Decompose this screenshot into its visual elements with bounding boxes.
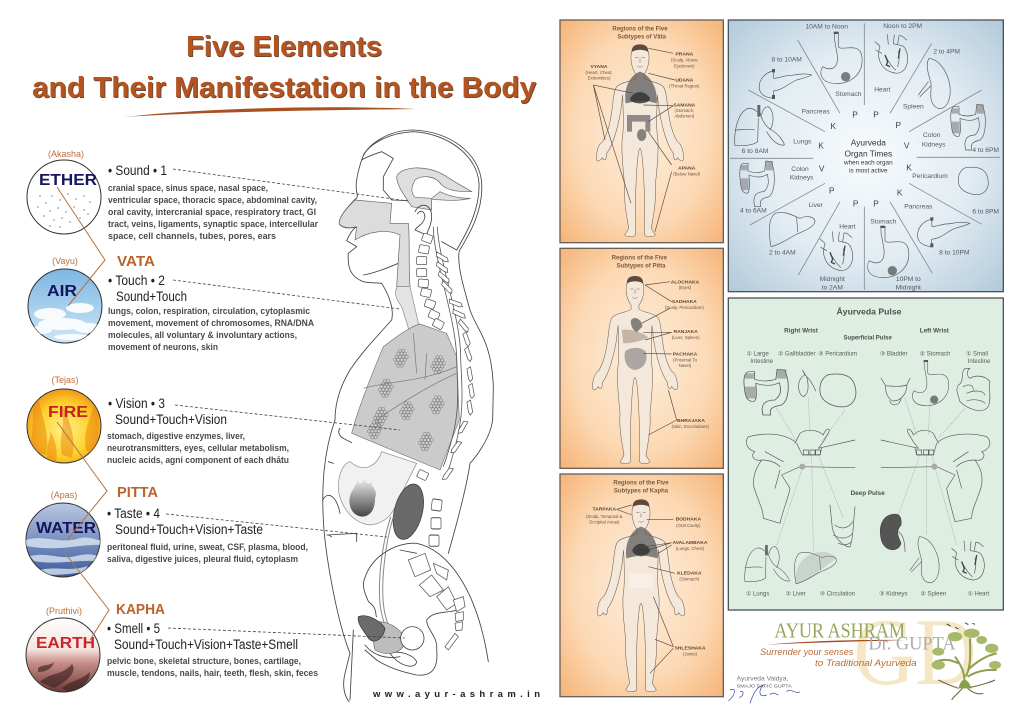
kapha body figure	[598, 499, 684, 692]
time and organ labels: Liver	[808, 202, 824, 209]
air block	[28, 253, 314, 353]
vata labels: Extremities)	[588, 76, 611, 81]
pulse organ labels	[746, 350, 991, 597]
logo watermark letters: GD	[853, 599, 977, 705]
pitta labels: (Proximal To	[673, 357, 698, 362]
pulse organ labels: ① Large	[746, 350, 769, 357]
vata labels: (Below Navel)	[673, 172, 701, 177]
body front and back lower outline	[323, 420, 493, 702]
pulse organ labels: ② Gallbladder	[778, 350, 815, 357]
pulse headings: Deep Pulse	[851, 490, 885, 497]
centre title	[843, 137, 893, 175]
time and organ labels: Kidneys	[790, 175, 814, 182]
ether text: ventricular space, thoracic space, abdominal cavity,	[108, 195, 317, 206]
time and organ labels: 8 to 10AM	[771, 56, 802, 63]
pitta heading: PITTA	[117, 484, 158, 501]
pitta panel title	[612, 255, 668, 269]
pulse organ labels: ① Lungs	[746, 590, 769, 597]
panel: vata subtypes	[560, 20, 723, 243]
time and organ labels: Stomach	[870, 219, 897, 226]
panel: ayurveda pulse	[728, 298, 1003, 610]
earth block	[26, 601, 318, 692]
bladder and rectum	[358, 616, 424, 653]
vata labels: PRANA	[675, 52, 694, 58]
time and organ labels: Spleen	[903, 104, 924, 111]
kapha labels: (Stomach)	[679, 577, 700, 582]
kapha labels: SHLESHAKA	[674, 646, 706, 652]
centre title: Organ Times	[844, 148, 892, 158]
organ drawings	[735, 32, 988, 278]
lungs	[352, 324, 459, 470]
vaidya credit: SMAJO SAFIĆ GUPTA	[737, 682, 792, 689]
ether text: tract, veins, ligaments, synaptic space, intercellular	[108, 219, 318, 230]
ureter	[379, 517, 395, 637]
fire text: neurotransmitters, eyes, cellular metabolism,	[107, 443, 289, 454]
dosha letters ring: P	[896, 120, 902, 130]
pitta labels: (Scalp, Pericardium)	[665, 305, 704, 310]
pulse headings: Left Wrist	[920, 327, 950, 334]
kapha labels: Occipital Areas)	[589, 520, 620, 525]
pulse organ labels: ② Stomach	[920, 350, 950, 357]
time and organ labels: 4 to 6AM	[740, 208, 767, 215]
pulse organ labels: Intestine	[968, 359, 991, 365]
time and organ labels: Stomach	[835, 91, 862, 98]
time and organ labels: 6 to 8AM	[742, 148, 768, 155]
air text: movement, movement of chromosomes, RNA/DNA	[108, 318, 314, 329]
pulse organ labels: ① Small	[966, 350, 988, 357]
dosha letters ring	[818, 109, 912, 208]
fire text	[107, 396, 289, 466]
icon: fire circle: FIRE	[48, 404, 88, 421]
icon: air circle: AIR	[47, 283, 77, 300]
kapha labels: BODHAKA	[676, 517, 701, 523]
icon: earth circle: EARTH	[36, 635, 95, 652]
time and organ labels: Heart	[874, 86, 891, 93]
pitta labels: (Liver, Spleen)	[672, 335, 700, 340]
icon: ether circle	[27, 160, 101, 234]
kapha leader lines	[617, 505, 675, 673]
air text	[108, 273, 314, 353]
pitta labels: BHRAJAKA	[677, 418, 705, 424]
website url: www.ayur-ashram.in	[372, 689, 540, 700]
time and organ labels: 10PM to	[896, 276, 921, 283]
nasal and throat cavities	[339, 200, 410, 287]
time and organ labels: Colon	[923, 132, 941, 139]
pitta labels: PACHAKA	[673, 351, 698, 357]
water sanskrit label: (Apas)	[51, 490, 77, 500]
centre title: when each organ	[843, 160, 893, 167]
icon: ether circle: ETHER	[39, 172, 97, 189]
air text: • Touch • 2	[108, 273, 165, 288]
earth sanskrit label: (Pruthivi)	[46, 606, 82, 616]
earth text	[107, 621, 318, 679]
clock spokes	[730, 23, 1000, 290]
time and organ labels: 10AM to Noon	[805, 24, 848, 31]
anatomical side-view body	[323, 130, 493, 702]
dosha letters ring: P	[829, 186, 835, 196]
kapha labels: AVALAMBAKA	[673, 540, 708, 546]
kapha panel title: Regions of the Five	[613, 480, 669, 486]
dosha bracket lines	[57, 187, 109, 640]
fire text: nucleic acids, agni component of each dhātu	[107, 455, 289, 466]
dotted connector: touch to throat	[173, 280, 400, 309]
air text: molecules, all voluntary & involuntary actions,	[108, 330, 297, 341]
fire text: Sound+Touch+Vision	[115, 412, 227, 427]
water text	[107, 506, 308, 565]
time and organ labels: Midnight	[896, 285, 921, 292]
pitta labels: SADHAKA	[672, 299, 697, 305]
pulse connector lines	[777, 398, 965, 552]
pulse organ labels: ③ Pericardium	[818, 350, 857, 357]
ether text: space, cell channels, tubes, pores, ears	[108, 231, 276, 242]
vata labels: (Stomach,	[674, 108, 694, 113]
kapha heading: KAPHA	[116, 601, 165, 618]
water text: peritoneal fluid, urine, sweat, CSF, plasma, blood,	[107, 542, 308, 553]
dosha letters ring: P	[873, 109, 879, 119]
vata labels: UDANA	[675, 77, 694, 83]
fire block	[27, 375, 289, 466]
time and organ labels: Heart	[839, 224, 856, 231]
kapha labels: KLEDAKA	[677, 571, 702, 577]
ether sanskrit label: (Akasha)	[48, 149, 84, 159]
pulse organ labels: ② Spleen	[920, 590, 946, 597]
earth text: • Smell • 5	[107, 621, 160, 636]
vata labels: (Throat Region)	[669, 83, 700, 88]
pulse organ labels: ② Liver	[786, 590, 806, 597]
icon: air circle	[28, 269, 102, 343]
time and organ labels: Pericardium	[912, 173, 948, 180]
pulse organ labels: Intestine	[750, 359, 774, 365]
pulse headings: Right Wrist	[784, 327, 819, 334]
air text: Sound+Touch	[116, 289, 187, 304]
title underline swoosh	[125, 107, 416, 117]
fire text: • Vision • 3	[108, 396, 165, 411]
dotted connector: vision to lungs	[175, 405, 400, 430]
dr gupta text: Dr. GUPTA	[868, 633, 956, 654]
vaidya credit	[737, 676, 792, 689]
earth text: Sound+Touch+Vision+Taste+Smell	[114, 637, 298, 652]
time and organ labels: Midnight	[820, 276, 845, 283]
dosha letters ring: V	[904, 141, 910, 151]
pulse headings: Superficial Pulse	[844, 336, 892, 342]
pulse organ labels: ① Heart	[967, 590, 989, 597]
pulse organ labels: ③ Circulation	[820, 590, 855, 597]
hands taking pulse	[746, 429, 990, 523]
dosha letters ring: V	[819, 163, 825, 173]
air text: lungs, colon, respiration, circulation, cytoplasmic	[108, 306, 311, 317]
air sanskrit label: (Vayu)	[52, 256, 78, 266]
ether text: cranial space, sinus space, nasal space,	[108, 183, 268, 194]
vata body figure	[597, 44, 683, 237]
vata labels: Eyebrows)	[674, 63, 695, 68]
dosha letters ring: P	[873, 198, 879, 208]
dotted connector: taste to kidney	[166, 514, 387, 537]
vata labels	[586, 52, 701, 177]
spine	[416, 227, 477, 546]
dosha letters ring: P	[852, 109, 858, 119]
time and organ labels: 2 to 4PM	[933, 49, 960, 56]
pitta labels: ALOCHAKA	[671, 280, 700, 286]
vata panel title	[612, 27, 668, 40]
vata heading: VATA	[117, 253, 155, 270]
kapha labels: (Joints)	[683, 652, 698, 657]
dosha letters ring: K	[831, 121, 837, 131]
time and organ labels: to 2AM	[822, 285, 843, 292]
time and organ labels: 4 to 6PM	[972, 147, 999, 154]
earth text: muscle, tendons, nails, hair, teeth, flesh, skin, feces	[107, 668, 318, 679]
time and organ labels: Kidneys	[922, 141, 946, 148]
kapha labels: (Lungs, Chest)	[676, 546, 705, 551]
water text: saliva, digestive juices, pleural fluid, cytoplasm	[107, 554, 298, 565]
time and organ labels: Pancreas	[802, 109, 830, 116]
vata leader lines	[593, 48, 675, 232]
time and organ labels: Lungs	[793, 139, 812, 146]
pitta labels: RANJAKA	[673, 329, 698, 335]
time and organ labels: 2 to 4AM	[769, 249, 796, 256]
logo swoosh	[767, 640, 907, 645]
pulse headings: Āyurveda Pulse	[837, 306, 902, 316]
pulse headings	[784, 306, 950, 497]
brain section	[397, 168, 472, 210]
ear	[415, 205, 432, 235]
water text: Sound+Touch+Vision+Taste	[115, 522, 263, 537]
kapha labels: (Oral Cavity)	[676, 523, 701, 528]
kapha panel title	[613, 480, 669, 494]
kapha labels: TARPAKA	[593, 507, 617, 513]
time and organ labels: 8 to 10PM	[939, 250, 970, 257]
sacrum and pelvis	[363, 543, 488, 675]
pitta leader lines	[642, 282, 677, 435]
vata labels: SAMANA	[673, 102, 696, 108]
trachea	[396, 287, 420, 333]
logo tagline	[760, 647, 917, 668]
kapha labels: (Scalp, Temporal &	[586, 514, 623, 519]
time and organ labels: 6 to 8PM	[972, 209, 999, 216]
time and organ labels: Colon	[791, 166, 809, 173]
centre title: Ayurveda	[851, 137, 886, 147]
vata labels: APANA	[678, 166, 696, 172]
vata labels: VYANA	[590, 64, 608, 70]
skull and face outline	[335, 130, 493, 420]
icon: water circle	[26, 503, 100, 577]
logo name: AYUR ASHRAM	[774, 618, 905, 642]
centre title: is most active	[849, 168, 888, 175]
logo tagline: Surrender your senses	[760, 647, 854, 657]
signature	[728, 685, 800, 703]
panel: pitta subtypes	[560, 248, 723, 468]
ether text: • Sound • 1	[108, 163, 167, 178]
earth text: pelvic bone, skeletal structure, bones, cartilage,	[107, 656, 301, 667]
ether text	[108, 163, 318, 242]
pitta labels: (Eyes)	[679, 285, 692, 290]
time and organ labels	[740, 23, 999, 292]
title: and Their Manifestation in the Body	[32, 72, 536, 104]
air text: movement of neurons, skin	[108, 342, 218, 353]
time and organ labels: Noon to 2PM	[883, 23, 922, 30]
dotted connector: sound to head	[173, 169, 408, 201]
water block	[26, 484, 308, 577]
pitta panel title: Regions of the Five	[612, 255, 668, 261]
time and organ labels: Pancreas	[904, 204, 933, 211]
pulse organ labels: ③ Bladder	[880, 350, 907, 357]
vata panel title: Subtypes of Vāta	[617, 34, 667, 40]
water text: • Taste • 4	[107, 506, 160, 521]
fire text: stomach, digestive enzymes, liver,	[107, 431, 245, 442]
pulse organ labels: ③ Kidneys	[879, 590, 907, 597]
kapha labels	[586, 507, 708, 657]
pitta panel title: Subtypes of Pitta	[617, 263, 666, 269]
panel: kapha subtypes	[560, 474, 723, 697]
dotted connector: smell to pelvis	[168, 628, 405, 638]
title: Five Elements	[186, 31, 382, 63]
kidney	[388, 481, 429, 543]
title	[32, 31, 536, 104]
fire sanskrit label: (Tejas)	[51, 375, 79, 385]
dosha letters ring: P	[853, 198, 859, 208]
vaidya credit: Ayurveda Vaidya,	[737, 676, 789, 683]
panel: ayurveda organ times	[728, 20, 1003, 292]
pitta labels: Navel)	[679, 363, 692, 368]
vata labels: (Scalp, Above	[671, 57, 698, 62]
icon: tree	[932, 623, 1001, 700]
icon: water circle: WATER	[36, 520, 96, 537]
digestive fire / stomach	[327, 452, 417, 542]
pulse organs	[744, 360, 990, 584]
pitta labels: (Skin, Excoriations)	[672, 424, 710, 429]
pitta labels	[665, 280, 710, 429]
icon: earth circle	[26, 618, 100, 692]
vata panel title: Regions of the Five	[612, 27, 668, 33]
icon: fire circle	[27, 389, 101, 463]
dosha letters ring: K	[897, 187, 903, 197]
dosha letters ring: K	[818, 141, 824, 151]
dosha letters ring: K	[906, 163, 912, 173]
logo: ayur ashram	[728, 599, 1001, 705]
vata labels: Abdomen)	[674, 113, 695, 118]
ether block	[27, 149, 318, 242]
ether text: oral cavity, intercranial space, respiratory tract, GI	[108, 207, 316, 218]
kapha panel title: Subtypes of Kapha	[614, 488, 669, 494]
vata labels: (Heart, Chest,	[586, 70, 612, 75]
pitta body figure	[593, 276, 677, 464]
logo tagline: to Traditional Ayurveda	[815, 658, 917, 668]
